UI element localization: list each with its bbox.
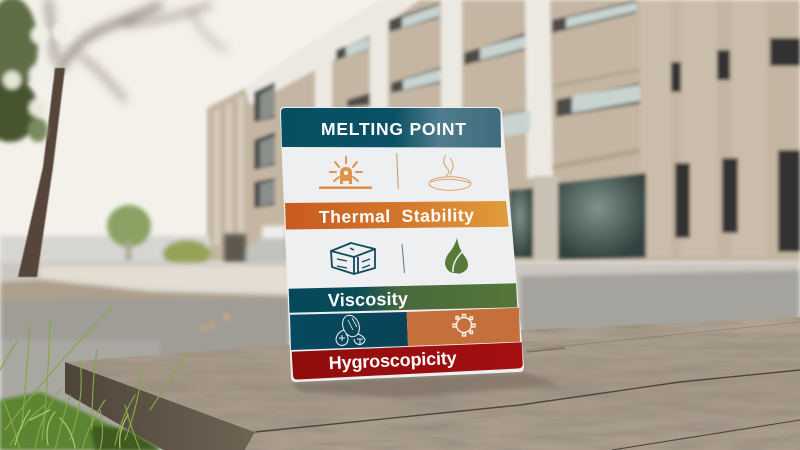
sign shadow on deck [292, 372, 560, 398]
sign board [280, 107, 524, 382]
small background tree [107, 205, 151, 262]
wooden deck top [65, 317, 800, 450]
plank cracks [255, 322, 800, 450]
pale window glass [260, 2, 644, 206]
orange panel [407, 308, 520, 346]
icon: gear molecule [453, 314, 475, 336]
dark grass roots [90, 425, 160, 450]
building facade [207, 0, 800, 262]
far pavement [0, 262, 800, 322]
tan verge [0, 280, 290, 305]
icon: sun over horizon [319, 157, 372, 189]
grass blades [0, 307, 188, 450]
tree foliage [0, 0, 72, 142]
distant horizon [0, 236, 210, 266]
hedge [163, 240, 211, 268]
band label: Thermal Stability [319, 205, 474, 227]
dark vehicle [224, 234, 246, 264]
title: MELTING POINT [321, 119, 466, 139]
parked car [241, 224, 286, 268]
divider [397, 153, 398, 189]
lower pillar [534, 176, 558, 261]
dark window slots [671, 38, 800, 252]
divider [402, 244, 404, 273]
band label: Hygroscopicity [328, 348, 457, 373]
white pillars [315, 0, 553, 178]
icon: steaming dish [429, 155, 471, 190]
light sidewalk [40, 266, 290, 294]
band label: Viscosity [328, 289, 408, 310]
road [0, 298, 290, 450]
left wing columns [214, 96, 244, 245]
ground surfaces [0, 262, 800, 450]
ground floor glass [509, 173, 646, 260]
teal panel [290, 312, 408, 350]
dark window strips [254, 0, 644, 208]
tree branches [48, 0, 225, 100]
right columns [640, 0, 766, 256]
fallen leaves [200, 314, 229, 330]
header band [281, 108, 501, 148]
facade shadow bands [464, 68, 640, 170]
roof fascia [245, 0, 420, 105]
foreground background items, blurred [0, 224, 286, 268]
grass highlights [15, 410, 128, 448]
wooden deck front face [65, 362, 255, 450]
tree trunk [18, 68, 65, 277]
icon: molecules [336, 313, 365, 345]
icon: leaf drop [445, 238, 468, 274]
grass [0, 307, 188, 450]
sign white backing [280, 107, 524, 382]
grass mass [0, 392, 163, 450]
thermal stability band [285, 201, 509, 230]
icon: box [331, 243, 375, 274]
hygroscopicity band [292, 342, 523, 380]
blurred building [207, 0, 800, 262]
viscosity band [289, 283, 517, 313]
